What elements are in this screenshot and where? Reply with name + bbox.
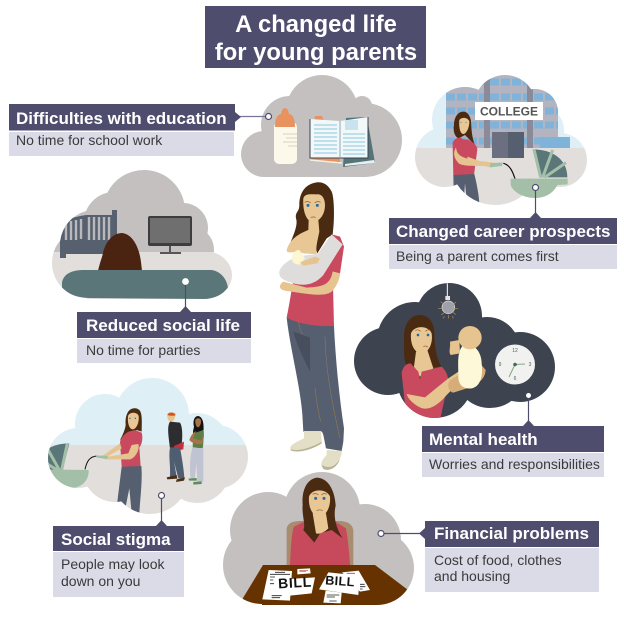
- bills: BILL: [325, 573, 355, 589]
- college sign: [475, 102, 543, 120]
- heading: Mental health: [429, 430, 538, 449]
- heading: Difficulties with education: [16, 109, 227, 128]
- pram: [490, 149, 568, 198]
- marker dot: [158, 492, 164, 498]
- title: for young parents: [215, 39, 417, 66]
- baby head and arm: [292, 250, 305, 265]
- icon: television: [148, 216, 192, 254]
- description: Being a parent comes first: [396, 248, 559, 264]
- connector: [184, 284, 186, 312]
- sofa: [62, 270, 228, 299]
- cloud with college, parent and pram: [410, 70, 590, 208]
- heading: [77, 306, 251, 338]
- icon: baby bottle: [274, 108, 297, 164]
- dark cloud with parent, baby, bulb and clock: [350, 280, 560, 422]
- cloud with bottle and books: [241, 75, 402, 177]
- marker dot: [183, 279, 188, 284]
- description: No time for school work: [16, 132, 163, 148]
- heading: [53, 520, 184, 551]
- parent seated at table: [287, 478, 353, 565]
- description: No time for parties: [86, 342, 200, 358]
- description: [77, 339, 251, 363]
- worried parent: [402, 315, 464, 420]
- connector: [236, 116, 266, 118]
- marker dot: [378, 530, 384, 536]
- cloud with sofa, crib and television: [52, 170, 232, 299]
- description: Worries and responsibilities: [429, 456, 600, 472]
- table: [242, 565, 408, 605]
- hair: [289, 182, 334, 253]
- icon: clock: 9: [499, 362, 502, 368]
- marker dot: [526, 393, 531, 398]
- icon: light bulb: [438, 283, 458, 318]
- description: [9, 132, 234, 156]
- connector: [534, 190, 536, 218]
- sling: [279, 234, 343, 285]
- description: and housing: [434, 568, 510, 584]
- shoes: [290, 431, 322, 450]
- heading: [9, 104, 241, 130]
- heading: [419, 521, 599, 547]
- connector: [384, 532, 421, 534]
- arm: [280, 272, 340, 295]
- description: [53, 552, 184, 597]
- eyes and mouth: [305, 201, 321, 217]
- onlooker: woman: [188, 416, 204, 485]
- panel: reduced social life: [52, 170, 251, 363]
- baby: [448, 326, 486, 393]
- description: [425, 548, 599, 592]
- heading: Social stigma: [61, 530, 171, 549]
- heading: [422, 420, 604, 452]
- central figure: young mother carrying baby in sling: [279, 182, 344, 470]
- heading: Reduced social life: [86, 316, 240, 335]
- description: down on you: [61, 573, 140, 589]
- face and chest: [287, 194, 325, 254]
- icon: crib: [60, 210, 117, 258]
- heading: Changed career prospects: [396, 222, 610, 241]
- panel: social stigma: [48, 378, 248, 597]
- heading: [389, 212, 617, 244]
- panel: changed career prospects: [389, 70, 617, 269]
- heading: Financial problems: [434, 524, 589, 543]
- shirt: [287, 234, 344, 326]
- panel: financial problems: [220, 470, 599, 610]
- icon: open books: [310, 116, 375, 167]
- description: Cost of food, clothes: [434, 552, 562, 568]
- bills: [262, 568, 370, 603]
- bills: BILL: [278, 574, 312, 591]
- parent pushing pram: [453, 112, 495, 207]
- icon: clock: 3: [529, 362, 532, 368]
- marker dot: [266, 114, 272, 120]
- description: [422, 453, 604, 477]
- marker dot: [532, 184, 538, 190]
- panel: mental health: [350, 280, 604, 477]
- onlooker: man: [167, 412, 185, 482]
- title: [205, 6, 426, 68]
- jeans shading and stitching: [293, 332, 310, 372]
- panel: difficulties with education: [9, 70, 410, 180]
- connector: [528, 397, 530, 426]
- cloud with parent and bills on table: [220, 470, 420, 610]
- icon: clock: 12: [512, 348, 518, 354]
- pram: [48, 443, 96, 488]
- cloud with parent, pram and onlookers: [48, 378, 248, 514]
- jeans: [287, 318, 344, 451]
- person seen from behind: [98, 233, 142, 271]
- description: People may look: [61, 556, 166, 572]
- description: [389, 245, 617, 269]
- parent: [96, 408, 142, 513]
- college building: [446, 72, 570, 158]
- icon: clock: [495, 344, 535, 384]
- college sign: COLLEGE: [480, 104, 538, 118]
- connector: [160, 498, 162, 526]
- icon: clock: 6: [514, 376, 517, 382]
- title: A changed life: [235, 11, 397, 38]
